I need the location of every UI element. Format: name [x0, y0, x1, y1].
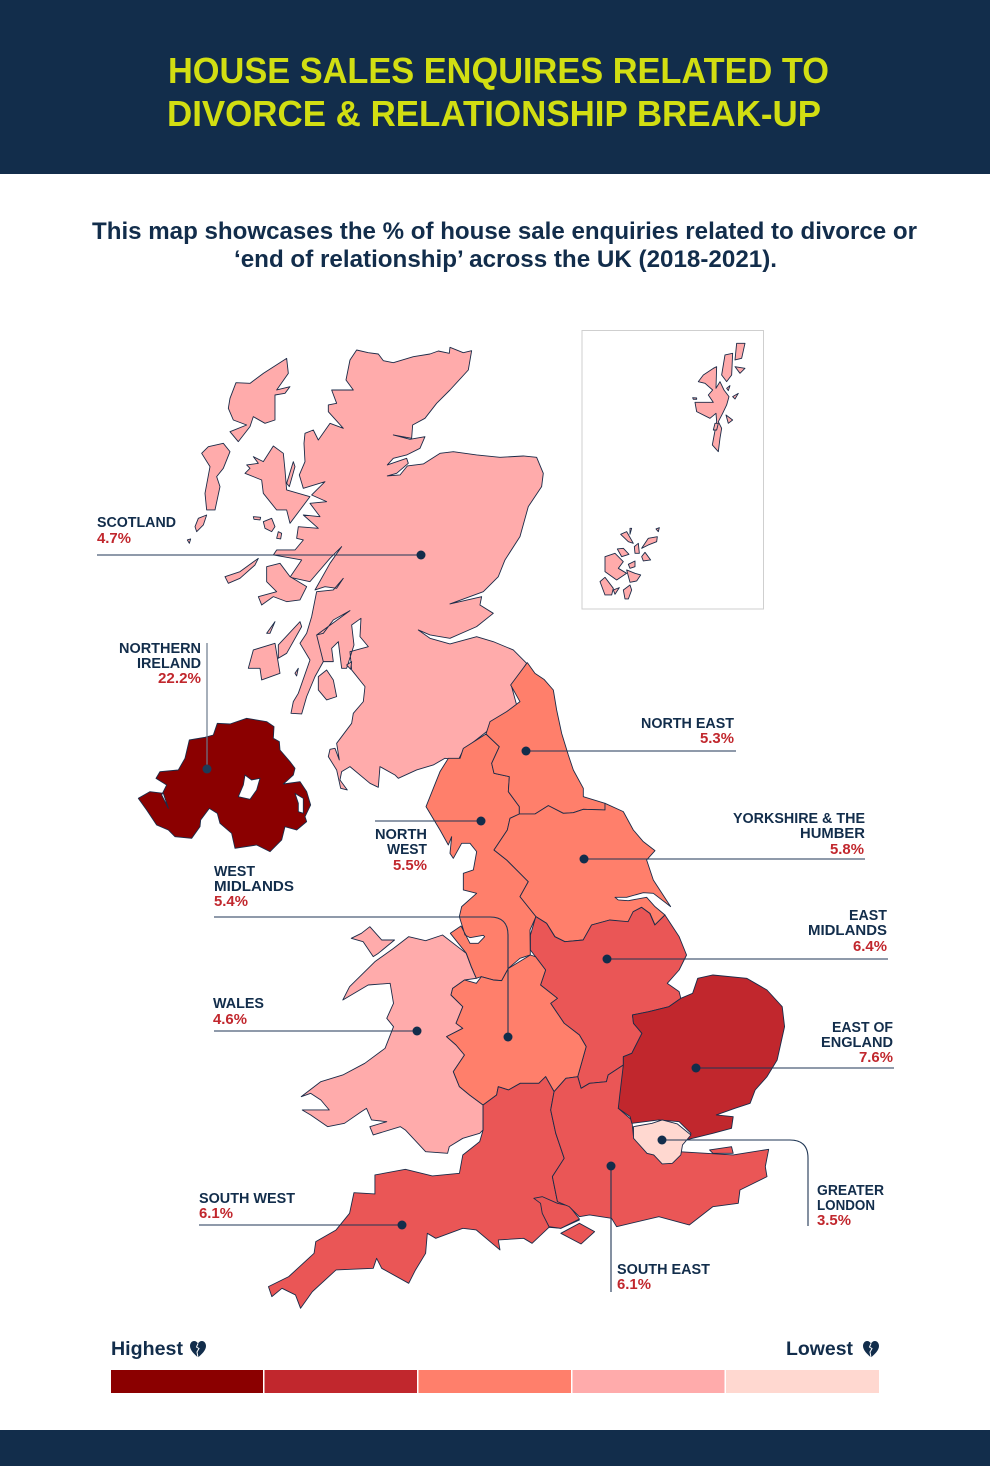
- callout: North West: 5.5%: [393, 858, 427, 874]
- callout: Wales: 4.6%: [213, 1012, 247, 1028]
- callout: Northern Ireland: IRELAND: [137, 656, 201, 672]
- callout: East of England: [692, 1020, 894, 1072]
- callout: Yorkshire and the Humber: HUMBER: [800, 826, 866, 842]
- callout: South West: SOUTH WEST: [199, 1191, 295, 1207]
- callout: South East: SOUTH EAST: [617, 1262, 710, 1278]
- callout: South West: 6.1%: [199, 1206, 233, 1222]
- callout: Northern Ireland: NORTHERN: [119, 641, 201, 657]
- legend: [111, 1339, 879, 1393]
- map: Northern Ireland: [138, 718, 311, 852]
- callout: West Midlands: [214, 864, 512, 1042]
- title: [167, 50, 829, 134]
- callout: North West: NORTH: [375, 827, 427, 843]
- callout: Yorkshire and the Humber: YORKSHIRE & THE: [733, 811, 865, 827]
- map: East of England: [618, 975, 785, 1140]
- callout: Greater London: GREATER: [817, 1183, 884, 1199]
- inset box: Orkney and Shetland: [582, 330, 764, 609]
- callout: East Midlands: MIDLANDS: [808, 923, 887, 939]
- map: East Midlands: [530, 907, 687, 1088]
- callout: Wales: [213, 996, 422, 1036]
- callout: North West: [375, 816, 486, 874]
- title: HOUSE SALES ENQUIRES RELATED TO: [168, 50, 829, 91]
- callout: Yorkshire and the Humber: 5.8%: [830, 842, 864, 858]
- legend label: lowest: Lowest: [786, 1339, 854, 1360]
- callout: North East: [522, 716, 736, 756]
- callout: North East: NORTH EAST: [641, 716, 734, 732]
- icon: broken heart lowest: [863, 1341, 879, 1358]
- legend label: highest: Highest: [111, 1339, 184, 1360]
- callout: West Midlands: 5.4%: [214, 894, 248, 910]
- callout: South East: 6.1%: [617, 1277, 651, 1293]
- subtitle: This map showcases the % of house sale enquiries related to divorce or: [92, 218, 917, 245]
- title: DIVORCE & RELATIONSHIP BREAK-UP: [167, 93, 821, 134]
- map: West Midlands: [447, 955, 586, 1105]
- callout: East of England: EAST OF: [832, 1020, 893, 1036]
- map: North East: [486, 663, 605, 814]
- callout: North West: WEST: [387, 842, 427, 858]
- callout: Scotland: SCOTLAND: [97, 515, 176, 531]
- callout: Northern Ireland: [119, 641, 212, 774]
- callout: West Midlands: WEST: [214, 864, 255, 880]
- callout: Greater London: [658, 1136, 884, 1229]
- callout: East Midlands: 6.4%: [853, 939, 887, 955]
- map: North West: [426, 734, 536, 981]
- header band: [0, 0, 990, 174]
- map: Yorkshire and the Humber: [494, 803, 671, 942]
- subtitle: ‘end of relationship’ across the UK (2018-2021).: [234, 246, 777, 273]
- callout: Yorkshire and the Humber: [580, 811, 866, 864]
- subtitle: [92, 218, 917, 273]
- map: South West: [268, 1077, 579, 1308]
- callout: East of England: 7.6%: [859, 1050, 893, 1066]
- callout: South West: [199, 1191, 406, 1230]
- callout: Northern Ireland: 22.2%: [158, 671, 201, 687]
- map: Wales: [301, 927, 483, 1153]
- map: South East: [551, 1065, 769, 1244]
- map: Scotland: [187, 347, 543, 790]
- callout: Scotland: 4.7%: [97, 531, 131, 547]
- callout: West Midlands: MIDLANDS: [214, 879, 294, 895]
- map: Shetland and Orkney islands: [600, 343, 745, 599]
- footer band: [0, 1430, 990, 1466]
- callout: Wales: WALES: [213, 996, 264, 1012]
- callout: East Midlands: [602, 908, 888, 964]
- callout: East Midlands: EAST: [849, 908, 887, 924]
- callout: East of England: ENGLAND: [821, 1035, 893, 1051]
- callout: North East: 5.3%: [700, 731, 734, 747]
- callout: South East: [606, 1162, 710, 1293]
- callout: Greater London: 3.5%: [817, 1213, 851, 1229]
- icon: broken heart highest: [190, 1341, 206, 1358]
- legend colour scale: [111, 1370, 879, 1393]
- map: Greater London: [633, 1120, 691, 1164]
- callout: Scotland: [97, 515, 426, 560]
- callout: Greater London: LONDON: [817, 1198, 875, 1214]
